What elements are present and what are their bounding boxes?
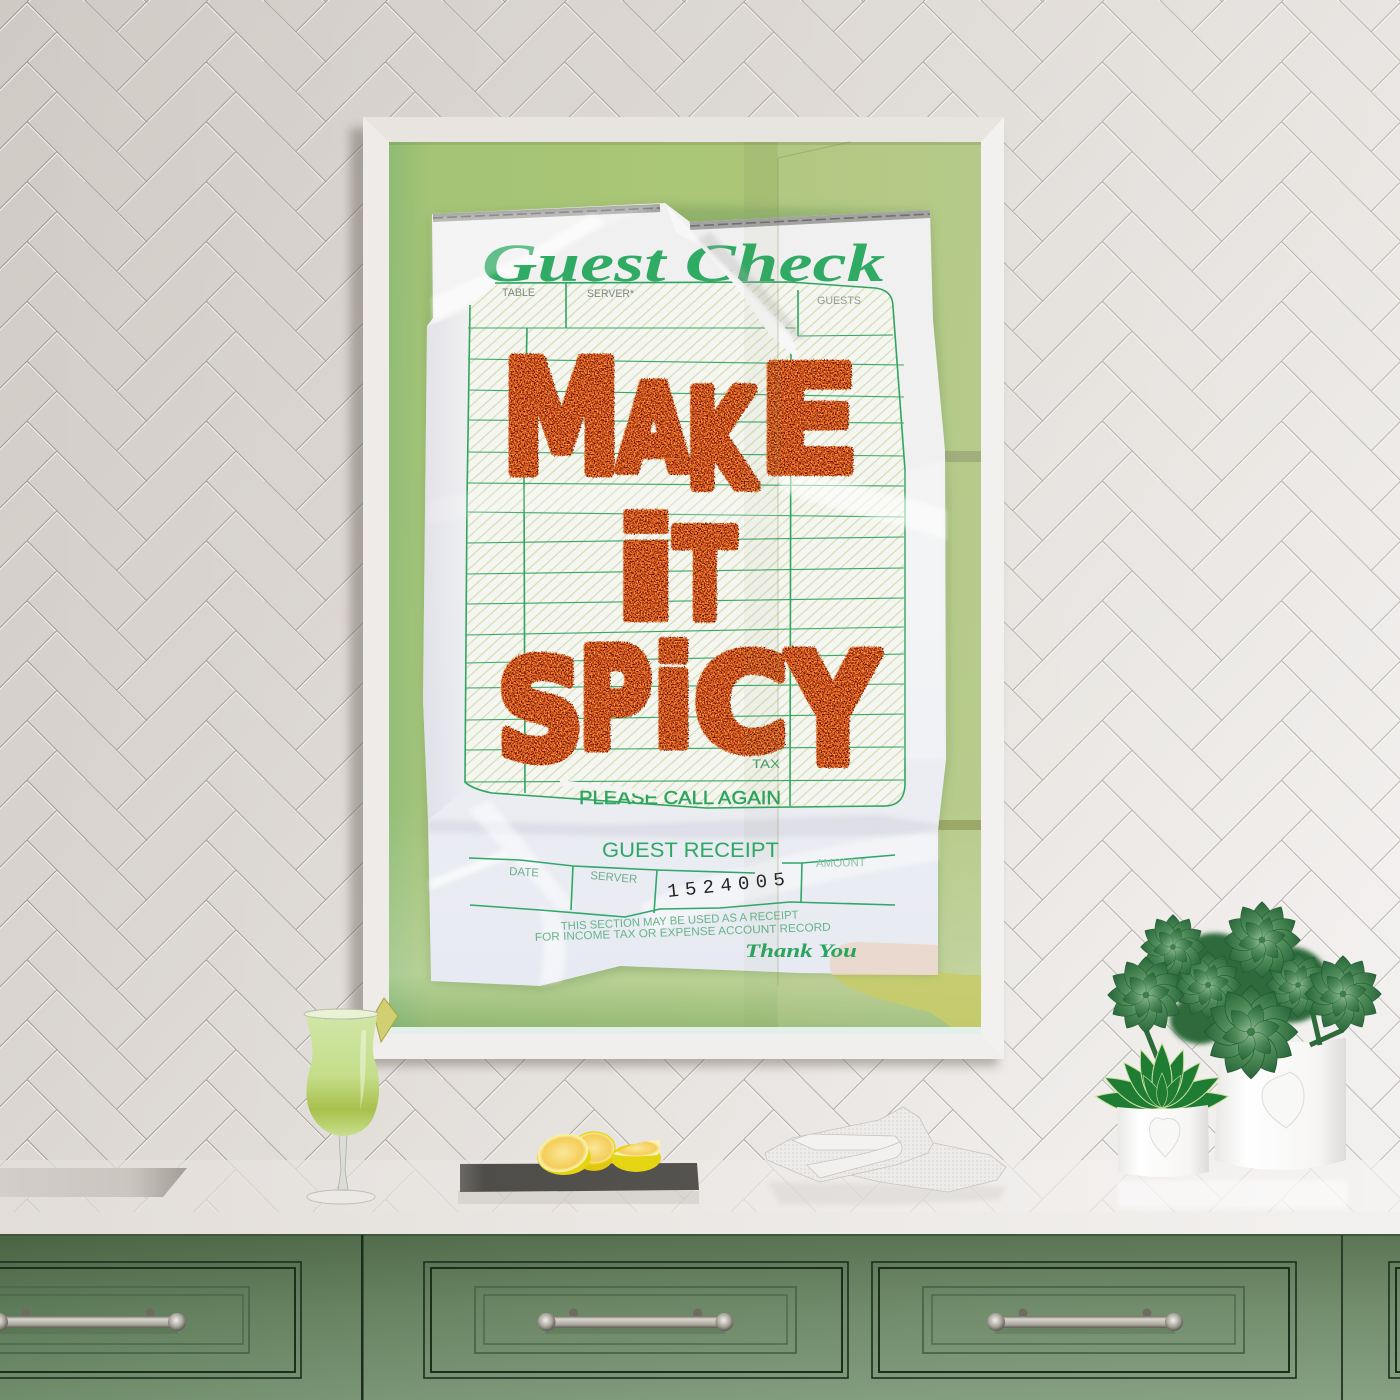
poster green background — [389, 142, 981, 1034]
grid column lines — [524, 282, 798, 806]
rosette right — [1304, 955, 1382, 1033]
rosette centre — [1204, 985, 1298, 1079]
pot body — [1214, 1038, 1346, 1170]
cabinet drawer panel right — [872, 1262, 1296, 1378]
rosette filler right — [1265, 952, 1331, 1018]
lemon half right — [611, 1140, 661, 1172]
slate board — [460, 1163, 699, 1192]
rosette upper left — [1140, 914, 1206, 980]
letter i of SPiCY: i — [650, 618, 696, 781]
letter i of iT: i — [608, 487, 683, 654]
drawer handle right — [987, 1308, 1183, 1334]
soft creases and folds — [427, 205, 946, 985]
fine print line 2: FOR INCOME TAX OR EXPENSE ACCOUNT RECORD — [535, 922, 831, 944]
paper shadow — [424, 205, 948, 990]
sink cut-out — [0, 1168, 187, 1197]
drawer handle centre — [538, 1308, 734, 1334]
letter Y: Y — [786, 624, 879, 798]
lime wedge — [374, 998, 398, 1042]
towel fold shadow — [807, 1142, 902, 1178]
lemon half front — [534, 1129, 592, 1177]
letter K: K — [686, 362, 757, 518]
label SERVER: SERVER — [590, 870, 638, 886]
label SERVER: SERVER* — [587, 288, 635, 300]
heading GUEST RECEIPT: GUEST RECEIPT — [602, 839, 779, 862]
rosette left — [1107, 956, 1185, 1034]
lemon half back — [573, 1132, 615, 1171]
rosette filler left — [1174, 951, 1242, 1019]
label TABLE: TABLE — [502, 287, 535, 299]
countertop — [0, 1160, 1400, 1235]
fold sliver over PLEASE — [560, 780, 665, 795]
pink reflection on the paper corner — [830, 942, 938, 975]
spiky leaves — [1094, 1043, 1230, 1118]
heading: Guest Check: Guest Check — [482, 233, 885, 293]
label PLEASE CALL AGAIN: PLEASE CALL AGAIN — [579, 788, 781, 808]
letter T: T — [674, 505, 735, 648]
cabinet drawer panel left — [0, 1262, 301, 1378]
grid row lines — [466, 328, 904, 782]
paper sheet — [423, 203, 946, 986]
stems — [1146, 970, 1343, 1070]
label AMOUNT: AMOUNT — [816, 857, 866, 870]
receipt ruled lines — [469, 855, 895, 917]
spice lettering: MAKE iT SPiCY — [497, 328, 879, 798]
small pot body — [1117, 1105, 1209, 1177]
large succulent plant — [1107, 901, 1382, 1079]
towel lower layer — [830, 1140, 1006, 1192]
label GUESTS: GUESTS — [817, 295, 861, 307]
fine print line 1: THIS SECTION MAY BE USED AS A RECEIPT — [561, 909, 799, 933]
leaf mass — [1170, 933, 1330, 1044]
pot reflection on counter — [1117, 1180, 1347, 1208]
glass reflection band — [744, 142, 850, 1027]
towel top layer — [792, 1134, 900, 1150]
rosette top right — [1223, 901, 1301, 979]
frame shadow on wall — [350, 128, 998, 1066]
letter M: M — [502, 328, 621, 509]
fold highlight left — [432, 214, 606, 322]
letter S: S — [497, 633, 583, 791]
small succulent in white pot — [1094, 1043, 1230, 1177]
hatched order grid — [465, 282, 905, 808]
perforated top edge — [433, 208, 930, 226]
receipt number: 1524005 — [666, 869, 786, 903]
cabinet drawer panel centre — [424, 1262, 848, 1378]
small pot heart emboss — [1150, 1118, 1180, 1157]
white picture frame — [363, 117, 1004, 1059]
drawer handle left — [0, 1308, 186, 1334]
pot heart emboss — [1262, 1072, 1304, 1128]
letter P: P — [578, 621, 652, 780]
towel reflection — [768, 1182, 1006, 1205]
towel upper fold — [765, 1107, 933, 1182]
window reflection bar lower — [930, 820, 981, 830]
glass stem — [338, 1135, 348, 1190]
thank you signature: Thank You — [745, 942, 857, 962]
glass rim — [304, 1009, 378, 1019]
crumpled guest check paper — [423, 203, 948, 990]
label DATE: DATE — [509, 866, 540, 880]
letter E: E — [757, 336, 860, 507]
reflected shape at lower right of the glass — [830, 960, 981, 1027]
bowl highlight — [360, 1030, 366, 1110]
large white pot with heart — [1214, 1038, 1346, 1170]
cocktail glass with lime wedge — [304, 998, 398, 1204]
folded white towel — [765, 1107, 1006, 1192]
board reflection — [458, 1191, 699, 1204]
glass foot — [307, 1190, 375, 1204]
cabinet drawer panel far right — [1389, 1262, 1400, 1378]
drink bowl — [306, 1016, 379, 1136]
label TAX: TAX — [752, 757, 780, 771]
slate cutting board with lemons — [460, 1129, 699, 1192]
guest receipt section — [469, 839, 895, 962]
letter C: C — [694, 628, 788, 780]
window reflection bar upper — [905, 451, 981, 462]
paper left margin shading — [423, 310, 470, 820]
letter A: A — [618, 361, 689, 498]
torn corner flap — [665, 203, 800, 362]
green cabinets — [0, 1234, 1400, 1400]
